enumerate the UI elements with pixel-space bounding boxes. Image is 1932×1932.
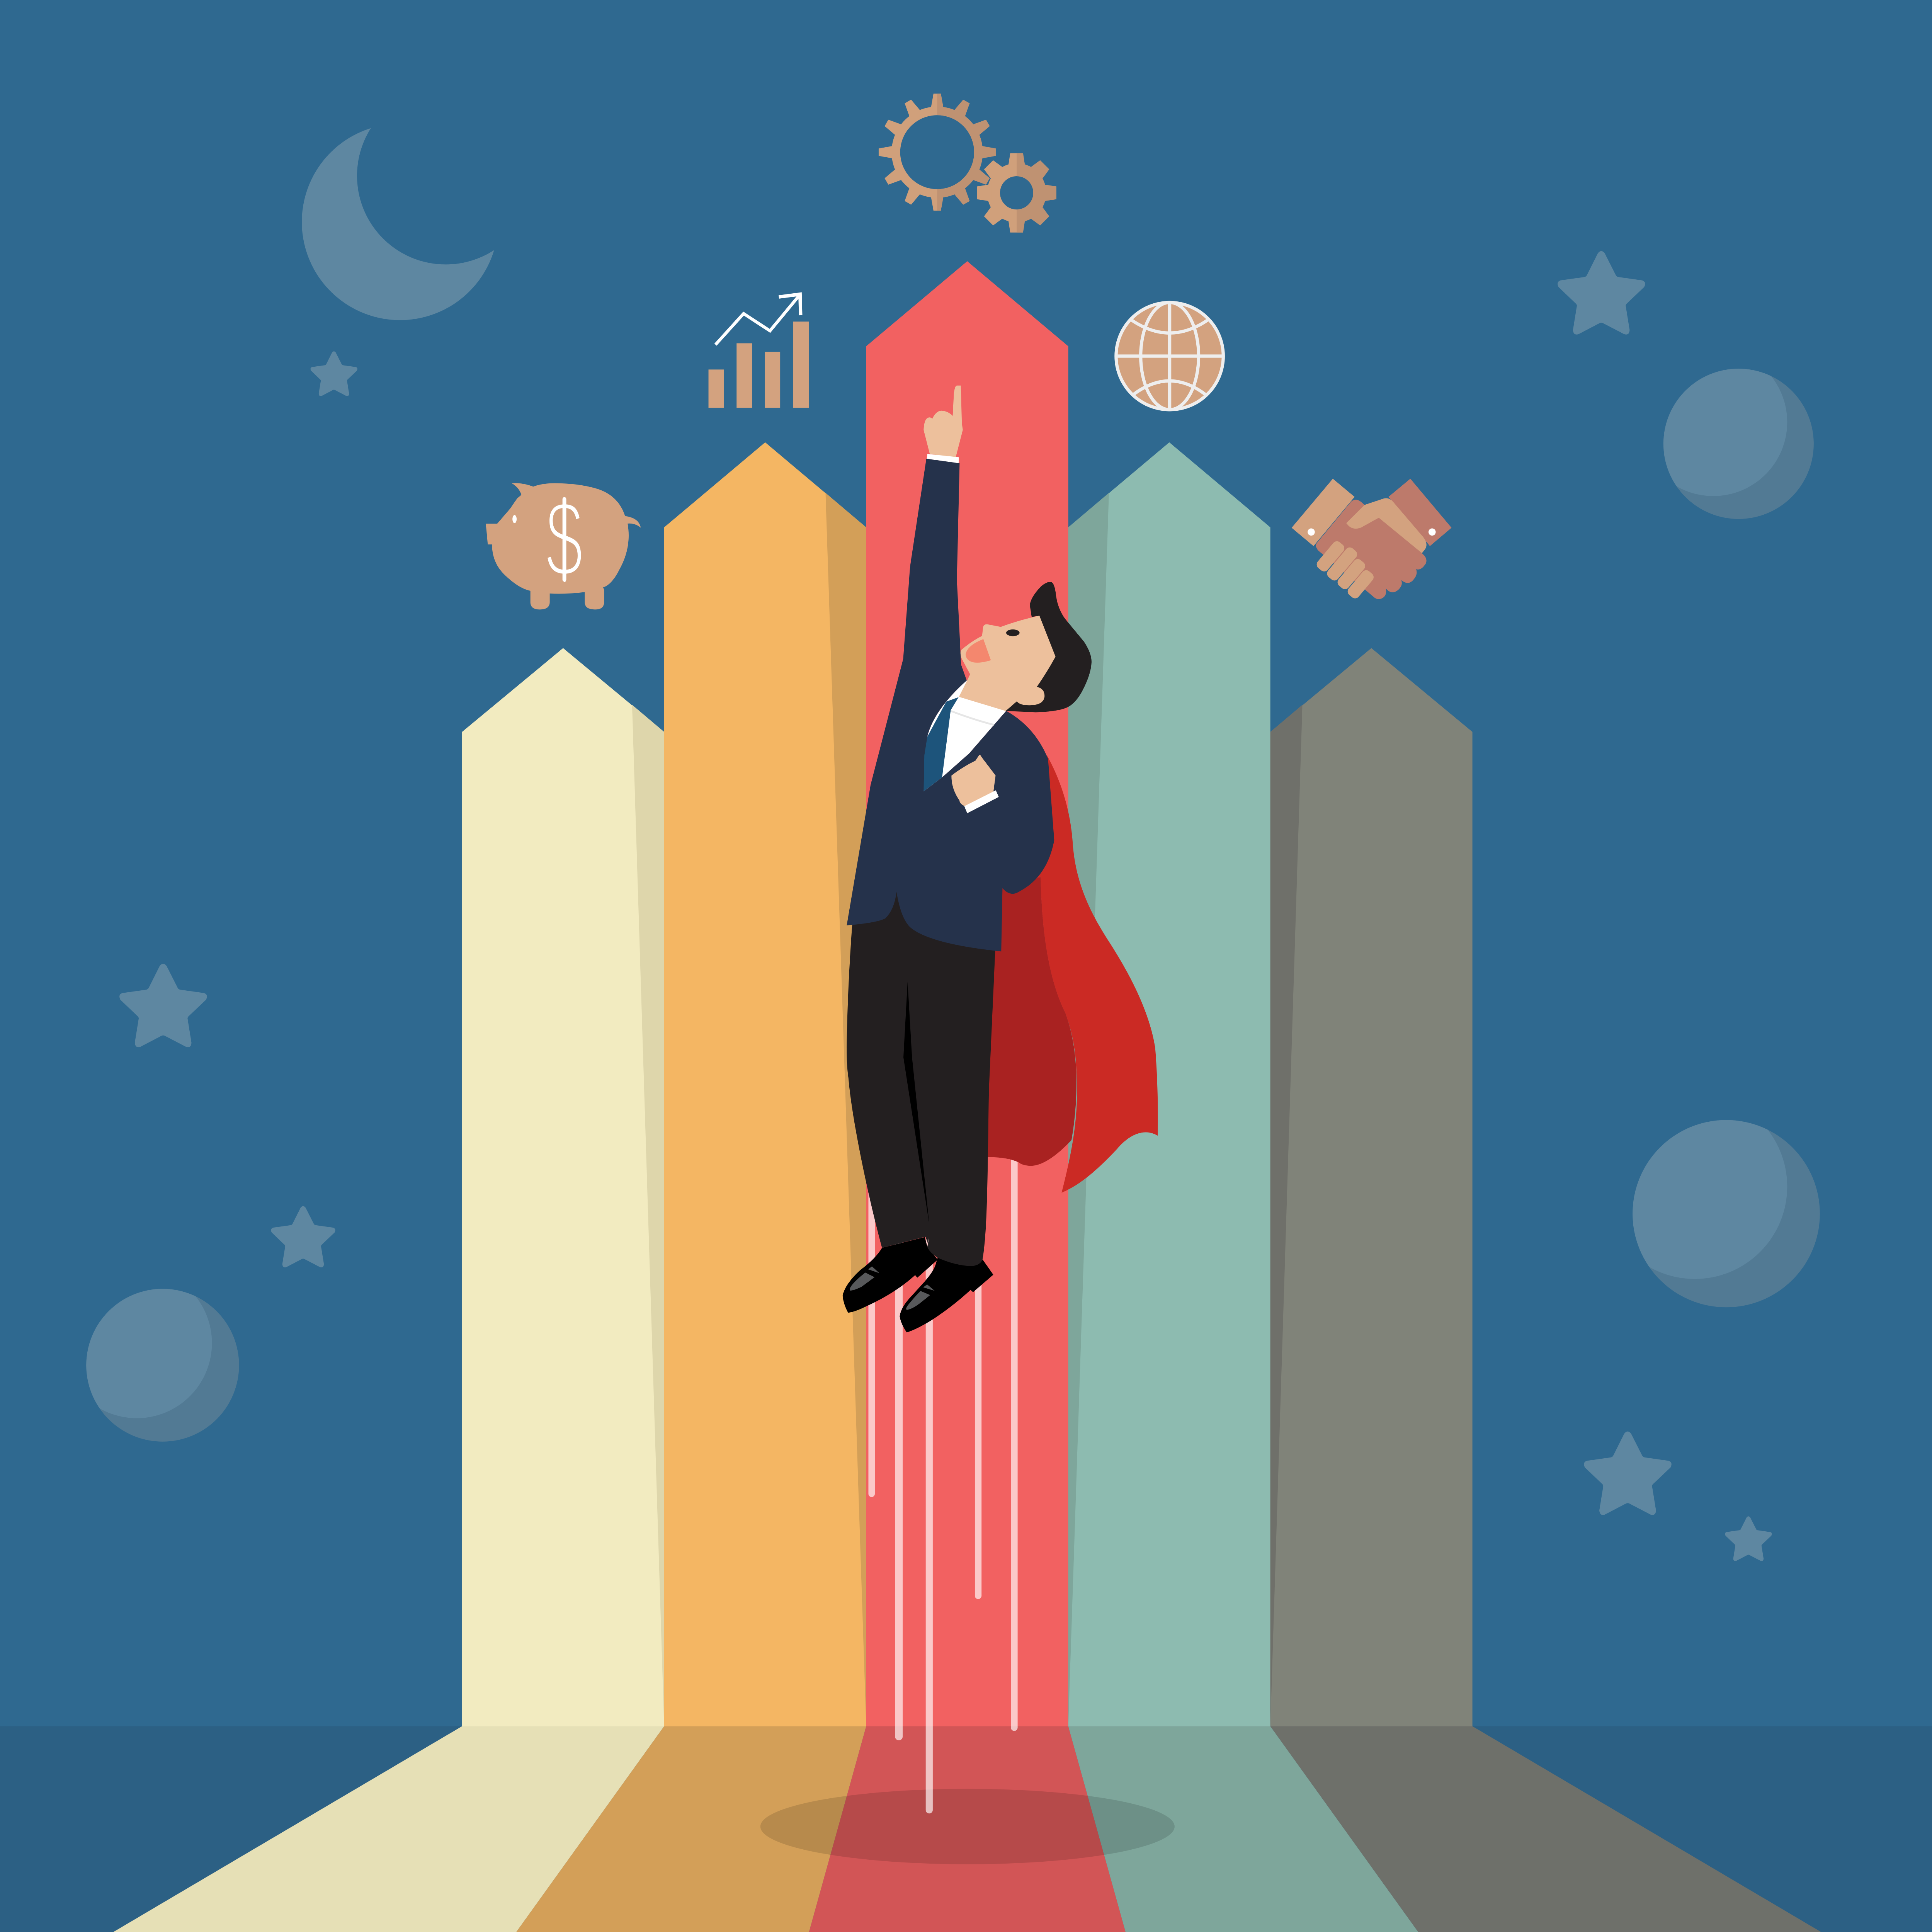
hair <box>1006 582 1092 712</box>
star: lower right small <box>1725 1516 1772 1561</box>
face <box>959 616 1056 711</box>
icon: globe <box>1116 303 1223 410</box>
ground shadow <box>760 1789 1175 1864</box>
star: upper right large <box>1558 251 1645 335</box>
chest cuff <box>964 790 999 813</box>
planet: lower left <box>86 1289 239 1442</box>
arrow: cream <box>462 648 664 1726</box>
star: left medium <box>271 1206 335 1267</box>
planet: upper right <box>1663 369 1814 519</box>
head <box>959 582 1092 712</box>
raised cuff <box>927 454 959 463</box>
floor perspective strips <box>113 1726 1821 1932</box>
jacket <box>847 459 1054 951</box>
arrow: gray <box>1270 648 1473 1726</box>
star: upper left small <box>311 351 357 396</box>
pointing hand <box>923 386 963 457</box>
tie <box>923 697 959 791</box>
star: left large <box>119 964 207 1047</box>
collar shade <box>951 711 994 725</box>
floor band <box>0 1726 1932 1932</box>
shoe: right <box>900 1258 993 1332</box>
star: lower right large <box>1584 1432 1672 1515</box>
shoe: left <box>843 1237 938 1313</box>
superhero businessman <box>843 386 1158 1332</box>
mouth <box>966 639 991 663</box>
shirt <box>923 680 1006 791</box>
eye <box>1006 629 1020 636</box>
crescent moon <box>302 128 494 320</box>
chest hand <box>951 755 996 807</box>
icon: gears <box>879 94 1056 233</box>
cape <box>980 755 1158 1193</box>
icon: handshake <box>1292 479 1452 600</box>
icon: bar chart with rising arrow <box>709 294 809 408</box>
arrow: teal <box>1068 442 1270 1726</box>
arrow: red <box>866 261 1068 1726</box>
planet: lower right <box>1633 1120 1820 1308</box>
icon: piggy bank: $ <box>546 478 583 600</box>
trousers <box>847 862 996 1266</box>
arrow: orange <box>664 442 866 1726</box>
speed lines <box>868 1146 1018 1813</box>
icon: piggy bank <box>486 478 641 609</box>
